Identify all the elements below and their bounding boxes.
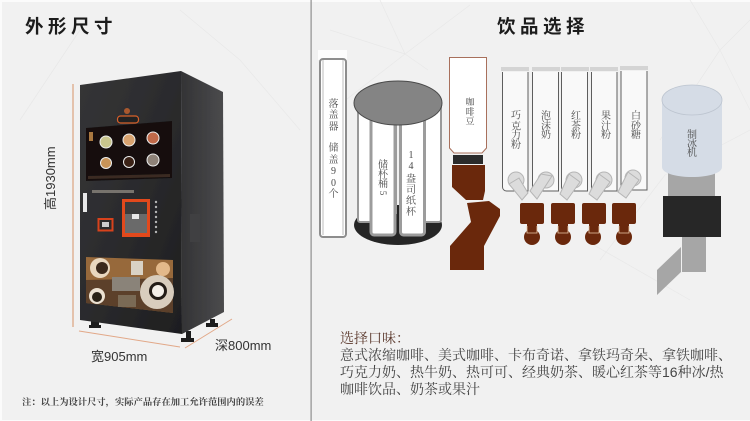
cup label: 杯 <box>406 205 417 218</box>
logo and cup slot <box>118 108 138 123</box>
small orange display <box>98 218 114 232</box>
cup label: 1 <box>408 150 414 161</box>
canister labels: 白 <box>631 109 641 122</box>
bean grinder chute <box>452 165 485 200</box>
canister labels: 奶 <box>541 128 551 141</box>
front cups <box>371 115 424 235</box>
canister labels: 果 <box>601 110 611 122</box>
label: depth: 深800mm <box>215 338 271 353</box>
lid dropper label: 个 <box>328 187 338 200</box>
back cups <box>358 105 441 222</box>
ice maker label: 冰 <box>687 137 697 150</box>
label: height: 高1930mm <box>43 146 58 210</box>
machine front <box>80 71 182 334</box>
cup barrel <box>354 81 442 245</box>
lid dropper label: 0 <box>331 178 336 189</box>
dimension lines <box>73 84 232 348</box>
canister labels: 糖 <box>631 128 641 141</box>
ice maker label: 制 <box>687 128 697 141</box>
canister labels: 泡 <box>541 109 551 122</box>
mixers <box>520 203 636 245</box>
machine side <box>181 71 224 334</box>
hopper label: 豆 <box>465 116 475 126</box>
barrel label: 杯 <box>378 168 389 180</box>
canister labels: 克 <box>511 120 521 132</box>
canister labels: 粉 <box>601 128 611 141</box>
coffee bean hopper <box>450 58 500 270</box>
canister labels: 汁 <box>601 119 611 132</box>
canister labels: 沫 <box>541 119 551 132</box>
flavour options text: 咖啡饮品、奶茶或果汁 <box>340 381 480 397</box>
lid dropper tube <box>318 50 347 237</box>
heading: 饮品选择: 饮品选择 <box>497 16 589 37</box>
canister labels: 茶 <box>571 119 581 132</box>
lid dropper label: 盖 <box>328 108 338 121</box>
ice maker <box>657 85 722 295</box>
flavour options text: 巧克力奶、热牛奶、热可可、经典奶茶、暖心红茶等16种冰/热 <box>340 364 724 380</box>
mixer highlights <box>527 226 629 233</box>
hopper label: 啡 <box>465 106 475 117</box>
touch screen <box>86 121 172 181</box>
flavour options text <box>340 330 732 397</box>
barrel lid <box>354 81 442 125</box>
flavour options text: 意式浓缩咖啡、美式咖啡、卡布奇诺、拿铁玛奇朵、拿铁咖啡、 <box>340 347 732 363</box>
orange dispensing bay <box>122 199 150 237</box>
canister labels <box>511 109 642 151</box>
hopper label: 咖 <box>465 96 475 107</box>
lid dropper label: 储 <box>328 141 338 154</box>
canister labels: 砂 <box>631 119 642 132</box>
machine feet <box>89 319 218 342</box>
barrel label: 储 <box>378 158 388 171</box>
note: 注：以上为设计尺寸，实际产品存在加工允许范围内的误差 <box>22 396 264 408</box>
canister labels: 粉 <box>511 138 521 151</box>
lid dropper label: 落 <box>328 97 338 110</box>
canister labels: 红 <box>571 110 581 122</box>
canister labels: 粉 <box>571 128 581 141</box>
lid dropper label: 器 <box>328 121 338 133</box>
barrel number: 5 <box>378 191 388 196</box>
heading: 外形尺寸: 外形尺寸 <box>25 16 117 37</box>
cup label: 盎 <box>406 172 416 185</box>
coffee photo panel <box>86 257 174 313</box>
cup label: 4 <box>408 161 414 172</box>
ice maker label: 机 <box>687 146 697 159</box>
cup label: 司 <box>406 184 416 196</box>
powder canisters <box>501 66 648 245</box>
control strip <box>83 190 157 233</box>
label: width: 宽905mm <box>91 349 147 364</box>
barrel label: 桶 <box>378 177 388 190</box>
canister labels: 巧 <box>511 110 521 122</box>
canister outlets <box>508 170 641 200</box>
lid dropper label: 盖 <box>328 153 338 166</box>
lid dropper label: 9 <box>331 166 336 177</box>
canister bodies <box>502 71 647 191</box>
canister caps <box>501 66 648 71</box>
canister labels: 力 <box>511 128 521 142</box>
flavour options text: 选择口味： <box>340 330 410 347</box>
cup label: 纸 <box>406 195 416 207</box>
vending machine <box>80 71 224 342</box>
barrel base <box>354 205 442 245</box>
